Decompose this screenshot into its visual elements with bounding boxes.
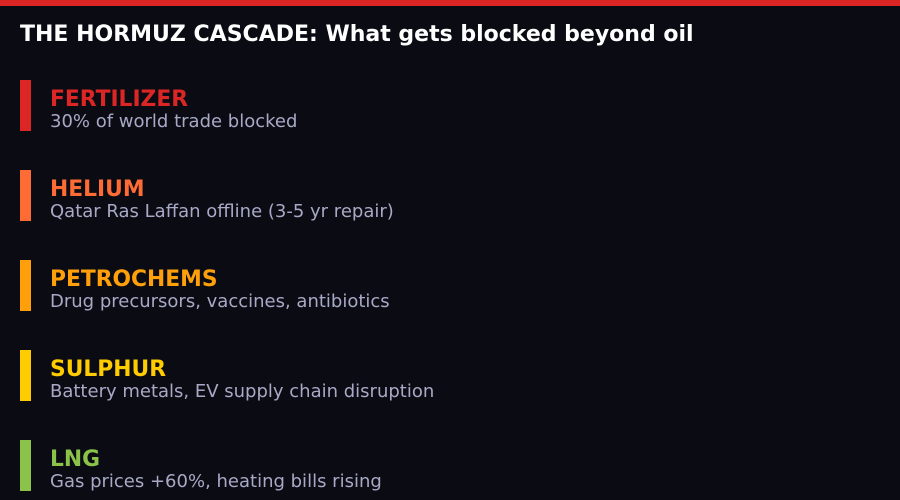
item: petrochems: PETROCHEMS	[50, 267, 218, 292]
top accent bar	[0, 0, 900, 6]
item: lng: Gas prices +60%, heating bills rising	[50, 471, 382, 492]
item: lng	[20, 440, 382, 492]
item: lng: LNG	[50, 447, 100, 472]
item: petrochems: Drug precursors, vaccines, antibiotics	[50, 291, 390, 312]
item: sulphur: Battery metals, EV supply chain disruption	[50, 381, 434, 402]
item: petrochems	[20, 260, 390, 312]
item: fertilizer: FERTILIZER	[50, 87, 188, 112]
item: helium: HELIUM	[50, 177, 145, 202]
item: sulphur	[20, 350, 434, 402]
item: fertilizer	[20, 80, 297, 132]
item: fertilizer: 30% of world trade blocked	[50, 111, 297, 132]
item: helium: Qatar Ras Laffan offline (3-5 yr repair)	[50, 201, 394, 222]
title: THE HORMUZ CASCADE: What gets blocked beyond oil	[20, 22, 694, 47]
item: helium	[20, 170, 394, 222]
item: sulphur: SULPHUR	[50, 357, 166, 382]
